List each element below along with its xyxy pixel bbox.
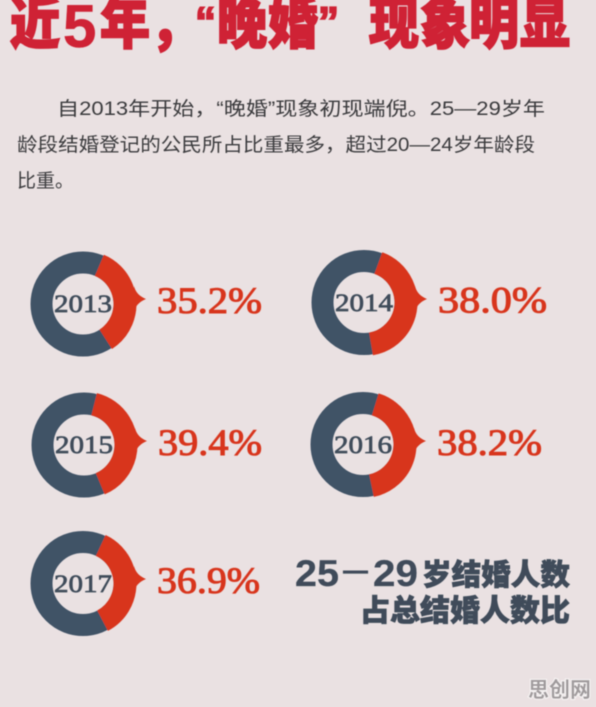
chart caption — [295, 553, 570, 628]
value 2015: 39.4% — [158, 423, 262, 464]
donut 2014 — [310, 249, 427, 356]
chart caption: — — [343, 554, 368, 587]
intro paragraph: 龄段结婚登记的公民所占比重最多，超过20—24岁年龄段 — [17, 134, 535, 156]
donut 2014: 2014 — [335, 290, 394, 317]
value 2017: 36.9% — [157, 561, 260, 602]
chart caption: 岁结婚人数 — [422, 559, 570, 592]
donut 2015 — [33, 394, 147, 496]
donut 2015: 2015 — [55, 432, 113, 459]
chart caption: 占总结婚人数比 — [360, 595, 570, 628]
donut 2016: 2016 — [334, 432, 392, 459]
intro paragraph: 自2013年开始，“晚婚”现象初现端倪。25—29岁年 — [57, 98, 545, 120]
intro paragraph — [17, 98, 545, 192]
value 2013: 35.2% — [157, 281, 262, 322]
watermark: 思创网 — [528, 679, 591, 702]
value 2014: 38.0% — [438, 280, 547, 322]
donut 2017 — [27, 528, 146, 639]
donut 2013 — [28, 249, 146, 359]
donut 2013: 2013 — [54, 291, 112, 318]
value 2016: 38.2% — [437, 423, 542, 464]
intro paragraph: 比重。 — [17, 170, 74, 192]
chart caption: 25 — [295, 553, 339, 594]
chart caption: 29 — [373, 553, 418, 594]
donut 2017: 2017 — [54, 571, 112, 598]
donut 2016 — [311, 392, 426, 497]
title — [10, 0, 570, 60]
